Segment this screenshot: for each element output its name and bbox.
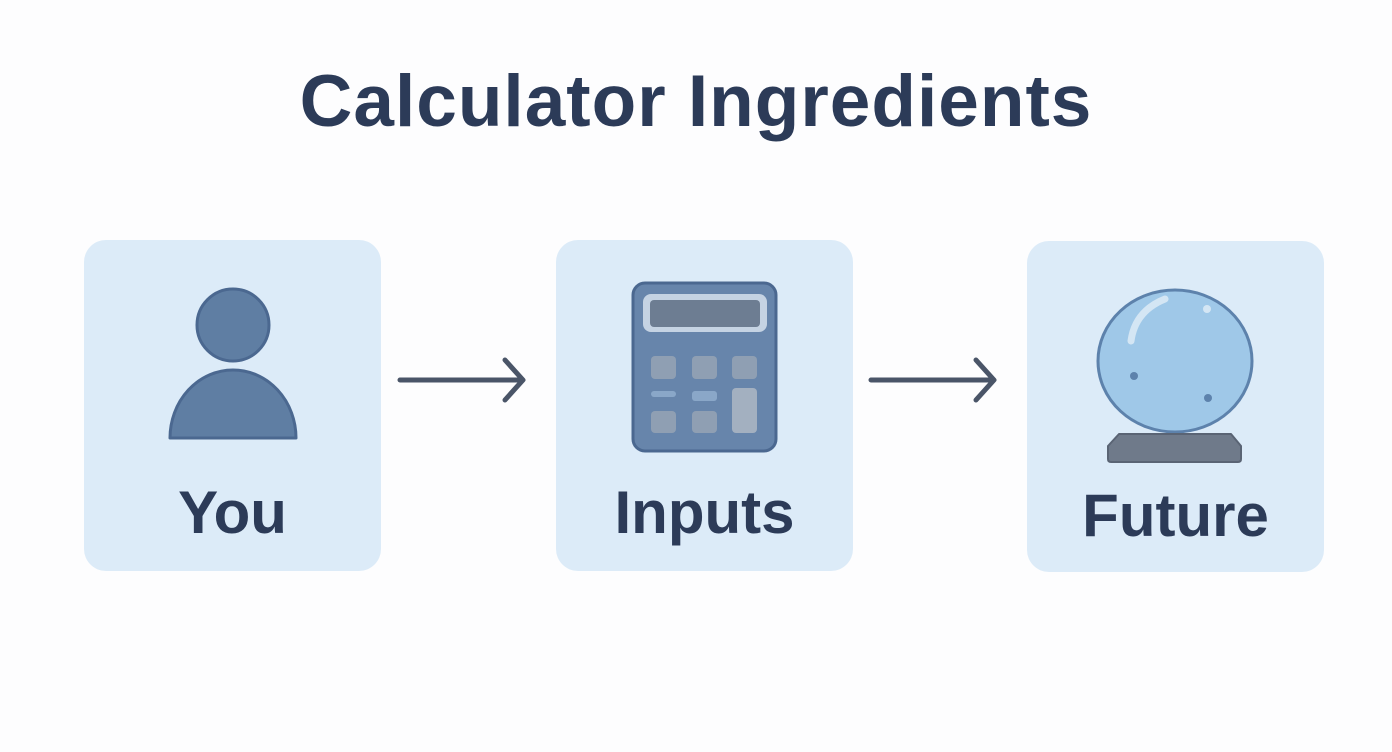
panel: you <box>84 240 381 571</box>
arrow 2 <box>868 358 997 402</box>
panel: inputs <box>556 240 853 571</box>
icon: person <box>168 288 298 440</box>
arrow 1 <box>398 358 526 402</box>
label: Future: Future <box>1082 482 1269 549</box>
title: Calculator Ingredients <box>300 61 1092 142</box>
label: Inputs: Inputs <box>614 479 794 546</box>
panel: future <box>1027 241 1324 572</box>
icon: crystal ball <box>1096 288 1254 463</box>
label: You: You <box>178 479 287 546</box>
icon: calculator <box>632 282 778 452</box>
